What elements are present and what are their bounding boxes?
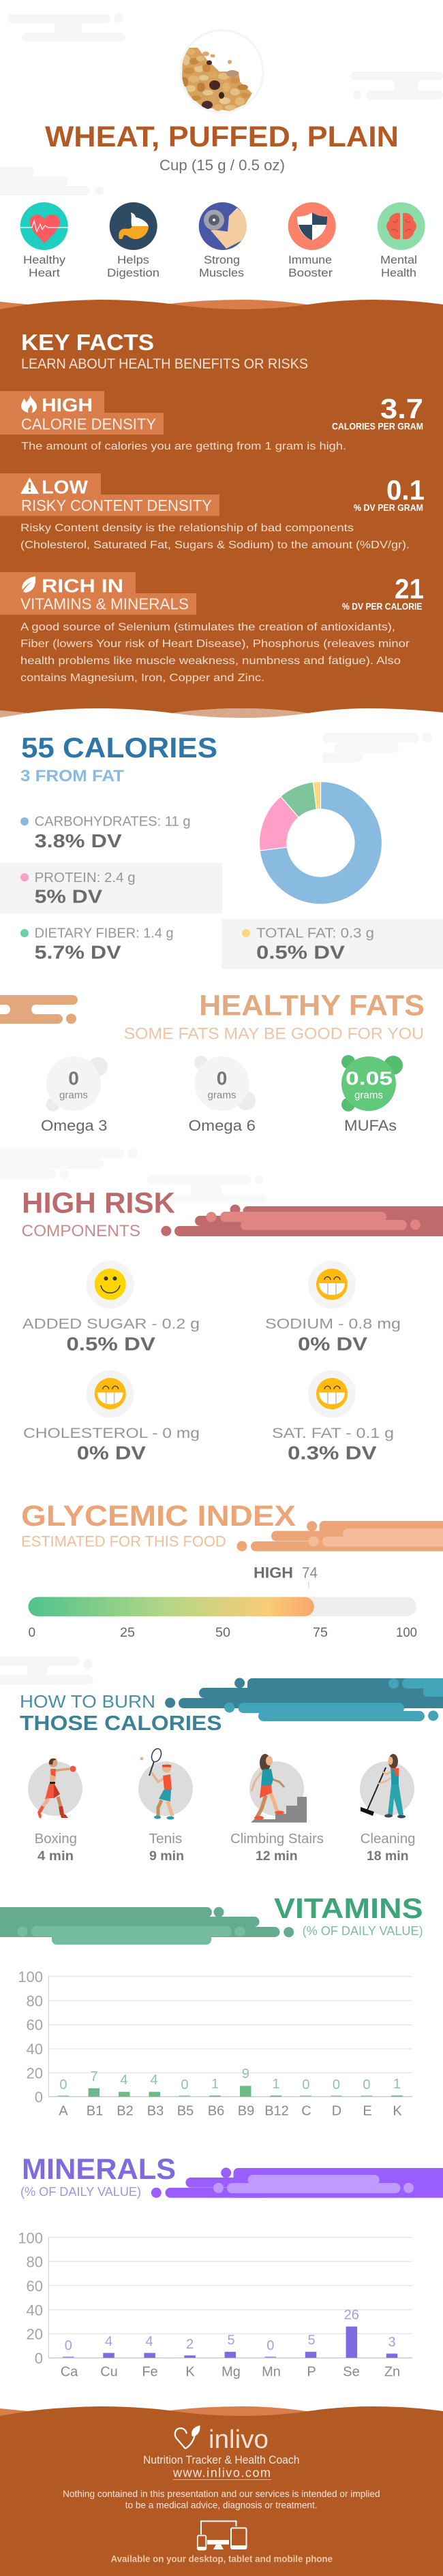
disclaimer <box>63 2488 380 2511</box>
fat: MUFAs: grams <box>354 1090 383 1101</box>
legend: carbohydrates <box>20 815 191 851</box>
fact: high calorie density: The amount of calories you are getting from 1 gram is high. <box>21 441 346 452</box>
fact: low risky content density: RISKY CONTENT DENSITY <box>21 497 212 514</box>
panel: footer background <box>0 2406 443 2576</box>
fact: low risky content density: LOW <box>42 477 89 498</box>
heading: how to burn those calories <box>20 1691 222 1735</box>
risk: sodium: SODIUM - 0.8 mg <box>265 1317 401 1332</box>
legend: total fat: 0.5% DV <box>256 942 345 963</box>
heading: minerals: MINERALS <box>22 2153 176 2186</box>
fact: low risky content density: (Cholesterol, Saturated Fat, Sugars & Sodium) to the amount (%DV/gr). <box>20 539 410 551</box>
heading: vitamins <box>274 1892 423 1938</box>
fat: omega 6: grams <box>207 1090 236 1101</box>
benefit: mental health: Health <box>381 266 416 279</box>
bar chart: vitamins: C <box>301 2104 311 2119</box>
bar chart: vitamins: B12 <box>264 2104 289 2119</box>
benefit: helps digestion: Digestion <box>107 266 159 279</box>
bar chart: vitamins: K <box>393 2104 402 2119</box>
risk: sodium <box>265 1261 401 1354</box>
bar chart: vitamins: 0 <box>333 2077 340 2092</box>
bar chart: minerals <box>18 2229 412 2379</box>
bar chart: vitamins: A <box>59 2104 68 2119</box>
fat: omega 3: Omega 3 <box>41 1117 108 1134</box>
benefit: healthy heart: Healthy <box>23 253 66 266</box>
benefit: helps digestion <box>107 202 159 279</box>
fat: MUFAs <box>341 1055 403 1134</box>
fat: omega 3 <box>41 1056 108 1134</box>
heading: key facts <box>21 330 308 372</box>
decorative cloud calories <box>322 733 432 763</box>
glycemic index meter: HIGH <box>254 1565 293 1582</box>
decorative bar: glycemic index <box>237 1521 443 1552</box>
legend: protein <box>0 863 222 913</box>
panel: key facts background <box>0 300 443 718</box>
bar chart: vitamins: 4 <box>150 2073 158 2088</box>
footer tagline and url: Nutrition Tracker & Health Coach <box>143 2453 300 2466</box>
legend: dietary fiber: 5.7% DV <box>35 942 121 963</box>
bar chart: minerals: 60 <box>27 2278 43 2295</box>
fact: high calorie density: CALORIES PER GRAM <box>332 421 423 432</box>
bar chart: minerals: 20 <box>27 2326 43 2343</box>
fact: rich in vitamins and minerals: VITAMINS & MINERALS <box>20 595 189 613</box>
bar chart: vitamins: 0 <box>363 2077 370 2092</box>
bar chart: minerals: 0 <box>35 2350 43 2367</box>
fact: rich in vitamins and minerals: health problems like muscle weakness, numbness and fatigue). Also <box>20 655 401 667</box>
bar chart: vitamins: B5 <box>177 2104 194 2119</box>
legend: dietary fiber <box>20 926 174 963</box>
heading: vitamins: (% OF DAILY VALUE) <box>303 1924 423 1938</box>
activity: tennis: 9 min <box>149 1849 184 1864</box>
serving size: Cup (15 g / 0.5 oz) <box>159 157 285 174</box>
heading: high risk <box>22 1187 175 1240</box>
fact: rich in vitamins and minerals <box>0 572 424 684</box>
bar chart: minerals: 40 <box>27 2302 43 2319</box>
glycemic index meter: 75 <box>313 1626 328 1640</box>
icon: warning triangle <box>20 477 39 494</box>
bar chart: minerals: Fe <box>142 2364 158 2379</box>
bar chart: minerals: 100 <box>18 2229 43 2246</box>
bar chart: minerals: 0 <box>65 2338 72 2353</box>
benefit: helps digestion: Helps <box>117 253 149 266</box>
risk: added sugar: ADDED SUGAR - 0.2 g <box>22 1317 200 1332</box>
fat: omega 6: Omega 6 <box>188 1117 256 1134</box>
fact: low risky content density <box>0 473 425 551</box>
heading: key facts: KEY FACTS <box>21 330 154 355</box>
bar chart: vitamins: 1 <box>272 2077 280 2092</box>
bar chart: vitamins: 20 <box>27 2064 43 2082</box>
bar chart: minerals: K <box>185 2364 195 2379</box>
bar chart: vitamins: 40 <box>27 2041 43 2058</box>
bar chart: minerals: 26 <box>344 2308 359 2323</box>
risk: saturated fat <box>272 1370 394 1464</box>
fact: rich in vitamins and minerals: A good source of Selenium (stimulates the creation of antioxidants), <box>20 621 395 633</box>
decorative cloud right <box>350 72 443 99</box>
glycemic index meter: 25 <box>120 1626 135 1640</box>
heading: high risk: COMPONENTS <box>22 1222 140 1240</box>
bar chart: minerals: Mg <box>222 2364 241 2379</box>
benefit: immune booster: Booster <box>288 266 333 279</box>
decorative cloud burn <box>0 1656 93 1684</box>
fact: rich in vitamins and minerals: RICH IN <box>42 576 123 597</box>
activity: cleaning <box>360 1754 416 1864</box>
benefit: strong muscles <box>199 202 247 279</box>
activity: climbing stairs: 12 min <box>256 1849 298 1864</box>
fact: rich in vitamins and minerals: % DV PER CALORIE <box>342 601 423 612</box>
decorative bar: burn <box>165 1678 443 1721</box>
bar chart: minerals: Se <box>343 2364 360 2379</box>
activity: tennis: Tenis <box>149 1832 182 1847</box>
fat: MUFAs: 0.05 <box>346 1068 393 1089</box>
disclaimer: Nothing contained in this presentation and our services is intended or implied <box>63 2488 380 2499</box>
bar chart: vitamins: B1 <box>87 2104 103 2119</box>
heading: high risk: HIGH RISK <box>22 1187 175 1220</box>
fact: low risky content density: % DV PER GRAM <box>354 503 423 513</box>
bar chart: vitamins: 100 <box>18 1968 43 1985</box>
bar chart: minerals: 0 <box>266 2338 274 2353</box>
risk: cholesterol <box>23 1370 200 1464</box>
glycemic index meter: 50 <box>215 1626 230 1640</box>
benefit: mental health: Mental <box>380 253 417 266</box>
heading: minerals: (% OF DAILY VALUE) <box>20 2185 141 2199</box>
bar chart: minerals: 3 <box>388 2335 396 2350</box>
bar chart: vitamins: 1 <box>393 2077 401 2092</box>
heading: glycemic index: ESTIMATED FOR THIS FOOD <box>21 1533 226 1550</box>
bar chart: vitamins: 1 <box>211 2077 219 2092</box>
benefit: strong muscles: Muscles <box>199 266 244 279</box>
fact: high calorie density: 3.7 <box>380 393 423 424</box>
icon: devices <box>198 2522 247 2550</box>
risk: added sugar <box>22 1261 200 1354</box>
glycemic index meter: 100 <box>396 1626 417 1640</box>
donut chart: macronutrients <box>259 782 382 905</box>
activity: boxing <box>28 1759 82 1864</box>
fat: MUFAs: MUFAs <box>344 1117 397 1134</box>
bar chart: vitamins: B2 <box>117 2104 134 2119</box>
bar chart: vitamins: 60 <box>27 2017 43 2034</box>
risk: cholesterol: CHOLESTEROL - 0 mg <box>23 1426 200 1441</box>
decorative clouds high risk <box>0 1148 266 1204</box>
bar chart: vitamins: 0 <box>59 2077 67 2092</box>
legend: dietary fiber: DIETARY FIBER: 1.4 g <box>35 926 174 941</box>
risk: cholesterol: 0% DV <box>77 1443 146 1464</box>
footer tagline and url: www.inlivo.com <box>172 2466 271 2480</box>
fact: high calorie density: CALORIE DENSITY <box>21 415 156 433</box>
icon: flame <box>21 395 37 413</box>
bar chart: vitamins: B6 <box>208 2104 224 2119</box>
bar chart: vitamins: 4 <box>120 2073 127 2088</box>
glycemic index meter: 74 <box>302 1565 318 1582</box>
food image: granola in circle <box>181 30 263 113</box>
bar chart: minerals: Mn <box>262 2364 281 2379</box>
bar chart: vitamins: 0 <box>302 2077 309 2092</box>
fat: omega 3: grams <box>59 1090 88 1101</box>
fact: rich in vitamins and minerals: Fiber (lowers Your risk of Heart Disease), Phosphorus (releaves minor <box>20 638 410 650</box>
benefit: immune booster: Immune <box>288 253 332 266</box>
risk: saturated fat: 0.3% DV <box>288 1443 377 1464</box>
fact: rich in vitamins and minerals: contains Magnesium, Iron, Copper and Zinc. <box>20 672 264 684</box>
bar chart: vitamins: B9 <box>238 2104 254 2119</box>
bar chart: minerals: 5 <box>227 2333 235 2348</box>
bar chart: minerals: P <box>307 2364 316 2379</box>
legend: carbohydrates: 3.8% DV <box>35 830 122 851</box>
bar chart: minerals: 4 <box>105 2334 112 2349</box>
heading: calories: 3 FROM FAT <box>20 767 124 785</box>
decorative cloud top left <box>7 14 125 42</box>
heading: healthy fats <box>124 990 425 1043</box>
icon: leaf <box>22 576 35 593</box>
benefit: healthy heart <box>20 202 68 279</box>
bar chart: minerals: Ca <box>61 2364 78 2379</box>
title: WHEAT, PUFFED, PLAIN <box>45 121 399 153</box>
benefit: strong muscles: Strong <box>204 253 240 266</box>
decorative bar: vitamins <box>0 1907 294 1945</box>
benefit: mental health <box>378 202 425 279</box>
availability note: Available on your desktop, tablet and mobile phone <box>110 2554 333 2564</box>
bar chart: minerals: 2 <box>186 2337 194 2352</box>
fact: rich in vitamins and minerals: 21 <box>395 574 424 605</box>
heading: calories <box>20 732 217 785</box>
benefit: immune booster <box>288 202 336 279</box>
fat: omega 6: 0 <box>217 1068 227 1089</box>
fact: low risky content density: 0.1 <box>386 475 425 506</box>
glycemic index meter <box>29 1565 417 1640</box>
fat: omega 3: 0 <box>68 1068 79 1089</box>
fat: omega 6 <box>188 1056 256 1134</box>
bar chart: vitamins: 9 <box>242 2067 249 2082</box>
footer tagline and url <box>143 2453 300 2480</box>
bar chart: vitamins: 0 <box>181 2077 188 2092</box>
bar chart: vitamins: 0 <box>35 2089 43 2106</box>
legend: carbohydrates: CARBOHYDRATES: 11 g <box>35 815 191 830</box>
logo: inlivo: inlivo <box>209 2425 269 2454</box>
bar chart: minerals: 4 <box>145 2334 153 2349</box>
bar chart: minerals: 5 <box>307 2333 316 2348</box>
heading: how to burn those calories: THOSE CALORIES <box>20 1711 222 1735</box>
heading: calories: 55 CALORIES <box>21 732 217 764</box>
bar chart: minerals: Cu <box>100 2364 118 2379</box>
disclaimer: to be a medical advice, diagnosis or treatment. <box>125 2500 318 2511</box>
decorative bar: high risk <box>161 1204 443 1236</box>
activity: boxing: Boxing <box>35 1832 77 1847</box>
activity: cleaning: 18 min <box>367 1849 409 1864</box>
benefit: healthy heart: Heart <box>29 266 60 279</box>
legend: total fat <box>222 919 443 969</box>
decorative cloud left <box>0 167 104 195</box>
risk: sodium: 0% DV <box>298 1334 367 1354</box>
bar chart: minerals: Zn <box>384 2364 400 2379</box>
activity: tennis <box>138 1747 193 1864</box>
decorative bar: healthy fats <box>0 995 78 1024</box>
heading: vitamins: VITAMINS <box>274 1892 423 1924</box>
bar chart: vitamins: 80 <box>27 1992 43 2009</box>
activity: climbing stairs: Climbing Stairs <box>230 1832 324 1847</box>
heading: key facts: LEARN ABOUT HEALTH BENEFITS OR RISKS <box>21 356 308 372</box>
activity: boxing: 4 min <box>37 1849 74 1864</box>
logo: inlivo <box>175 2425 269 2454</box>
heading: how to burn those calories: HOW TO BURN <box>20 1691 155 1712</box>
heading: glycemic index: GLYCEMIC INDEX <box>21 1500 296 1533</box>
fact: high calorie density <box>0 391 423 452</box>
risk: added sugar: 0.5% DV <box>66 1334 155 1354</box>
legend: protein: 5% DV <box>35 886 102 907</box>
fact: low risky content density: Risky Content density is the relationship of bad components <box>20 522 354 534</box>
bar chart: vitamins: D <box>332 2104 341 2119</box>
fact: high calorie density: HIGH <box>42 394 93 415</box>
bar chart: vitamins <box>18 1968 412 2119</box>
heading: healthy fats: SOME FATS MAY BE GOOD FOR YOU <box>124 1025 424 1043</box>
bar chart: vitamins: 7 <box>90 2069 98 2084</box>
legend: protein: PROTEIN: 2.4 g <box>35 870 136 885</box>
heading: glycemic index <box>21 1500 296 1550</box>
bar chart: vitamins: B3 <box>147 2104 164 2119</box>
bar chart: minerals: 80 <box>27 2254 43 2271</box>
decorative bar: minerals <box>151 2167 443 2198</box>
activity: climbing stairs <box>230 1754 324 1864</box>
legend: total fat: TOTAL FAT: 0.3 g <box>256 926 374 941</box>
glycemic index meter: 0 <box>29 1626 35 1640</box>
bar chart: vitamins: E <box>363 2104 372 2119</box>
activity: cleaning: Cleaning <box>361 1832 416 1847</box>
risk: saturated fat: SAT. FAT - 0.1 g <box>272 1426 394 1441</box>
heading: healthy fats: HEALTHY FATS <box>199 990 425 1022</box>
